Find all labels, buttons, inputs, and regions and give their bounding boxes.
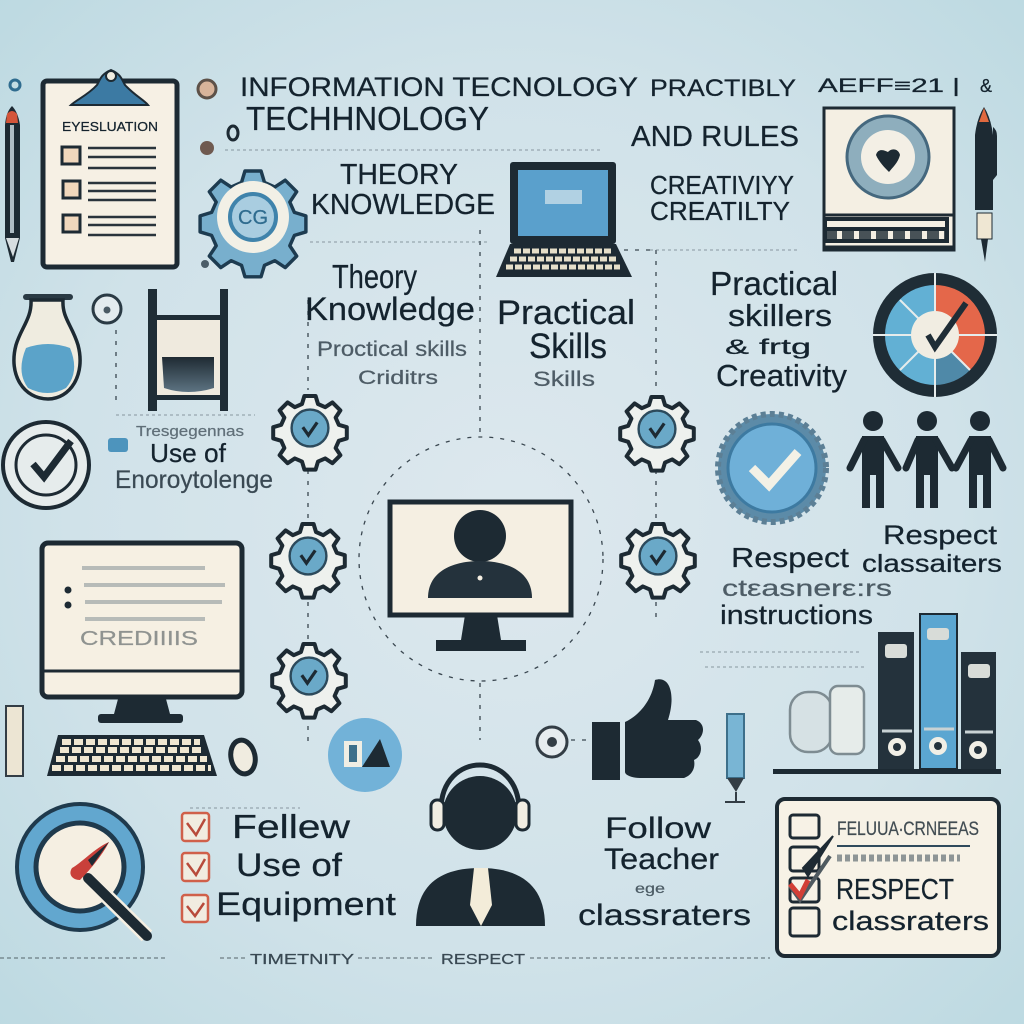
text: follow teacher classraters: Teacher [604, 843, 719, 876]
checklist: follow use of equipment: Equipment [216, 886, 396, 922]
text: use of knowledge: Tresgegennas [136, 423, 244, 440]
icon: binders [773, 614, 1001, 774]
connector lines [116, 230, 656, 745]
faint dotted rules [116, 150, 865, 808]
icon: small circle target [93, 295, 121, 323]
icon: laptop [496, 162, 632, 277]
gears column left [271, 396, 347, 718]
header scribble right: AEFF≡21 | [818, 76, 960, 97]
text: practical skillers creativity: Creativity [716, 358, 847, 393]
title: INFORMATION TECNOLOGY [240, 72, 638, 102]
text: theory knowledge middle [305, 258, 475, 389]
text: theory knowledge top: KNOWLEDGE [311, 189, 495, 221]
text: practical skillers creativity [710, 265, 847, 393]
text: theory knowledge middle: Theory [332, 258, 417, 295]
text: practical skills center: Skills [533, 368, 595, 391]
text: respect instructions: ctεasnerε:rs [722, 575, 892, 601]
icon: beaker tower [148, 289, 228, 411]
icon: small crosshair [537, 727, 567, 757]
title: TECHHNOLOGY [246, 100, 489, 137]
icon: vertical tube [725, 714, 745, 802]
text: respect classmates right: Respect [883, 520, 998, 550]
icon: center monitor with person [390, 502, 571, 651]
text: respect instructions [720, 542, 892, 630]
icon: clipboard evaluation: EYESLUATION [62, 119, 158, 134]
text: creativity: CREATIVIYY [650, 170, 794, 200]
text: follow teacher classraters: classraters [578, 899, 751, 932]
icon: clipboard evaluation [43, 70, 177, 267]
header scribble right [818, 76, 992, 97]
text: follow teacher classraters [578, 812, 751, 932]
text: practical skillers creativity: skillers [728, 298, 832, 333]
text: follow teacher classraters: Follow [605, 812, 711, 845]
text: creativity: CREATILTY [650, 196, 790, 226]
footer dashed line [0, 957, 770, 959]
gear: theory: CG [238, 207, 268, 229]
icon: badge check [718, 414, 826, 522]
icon: gauge [873, 273, 997, 397]
text: practical skills center [497, 294, 635, 391]
text: use of knowledge: Enoroytolenge [115, 466, 273, 494]
text: theory knowledge top [311, 159, 495, 221]
icon: mouse [228, 738, 258, 776]
text: practical skillers creativity: Practical [710, 265, 838, 302]
icon: pen right [975, 107, 997, 262]
text: respect instructions: instructions [720, 600, 873, 630]
title: AND RULES [631, 121, 799, 153]
text: respect classmates right [862, 520, 1002, 578]
text: use of knowledge [108, 423, 273, 494]
text: respect instructions: Respect [731, 542, 849, 573]
text: theory knowledge top: THEORY [340, 159, 458, 191]
title [240, 72, 799, 153]
icon: left desktop: CREDIIIIS [80, 628, 198, 650]
checklist: follow use of equipment: Use of [236, 847, 342, 883]
panel: checklist respect [777, 799, 999, 956]
text: practical skillers creativity: & frtg [725, 336, 811, 359]
icon: thumbs up [592, 679, 703, 780]
small decorative icons near title [10, 80, 238, 268]
text: use of knowledge: Use of [150, 438, 227, 468]
gears column right [620, 397, 695, 598]
icon: flask [14, 294, 80, 399]
icon: person with headset [416, 765, 545, 926]
icon: pen left [5, 106, 20, 262]
icon: target with hammer [17, 804, 147, 936]
gear: theory [200, 171, 306, 277]
text: practical skills center: Skills [529, 327, 607, 366]
text: practical skills center: Practical [497, 294, 635, 332]
panel: checklist respect: FELUUA∙CRNEEAS [837, 819, 979, 840]
icon: left desktop [42, 543, 242, 723]
footer labels: TIMETNITY [250, 951, 354, 968]
text: respect classmates right: classaiters [862, 550, 1002, 578]
footer labels: RESPECT [441, 951, 525, 968]
small blue document circle [328, 718, 402, 792]
panel: checklist respect: classraters [832, 906, 989, 936]
header scribble right: & [980, 76, 992, 96]
icon: keyboard [47, 735, 217, 776]
checklist: follow use of equipment [182, 808, 396, 922]
icon: usb stick [6, 706, 23, 776]
icon: three people [850, 411, 1003, 508]
text: theory knowledge middle: Knowledge [305, 291, 475, 327]
title: PRACTIBLY [650, 75, 796, 102]
text: theory knowledge middle: Criditrs [358, 368, 438, 389]
panel: checklist respect: RESPECT [836, 874, 954, 906]
text: creativity [650, 170, 794, 226]
text: theory knowledge middle: Proctical skills [317, 338, 467, 361]
icon: target picture card [824, 108, 954, 250]
text: follow teacher classraters: ege [635, 880, 665, 896]
checklist: follow use of equipment: Fellew [232, 808, 350, 845]
footer labels [250, 951, 525, 968]
icon: check circle [3, 422, 89, 508]
